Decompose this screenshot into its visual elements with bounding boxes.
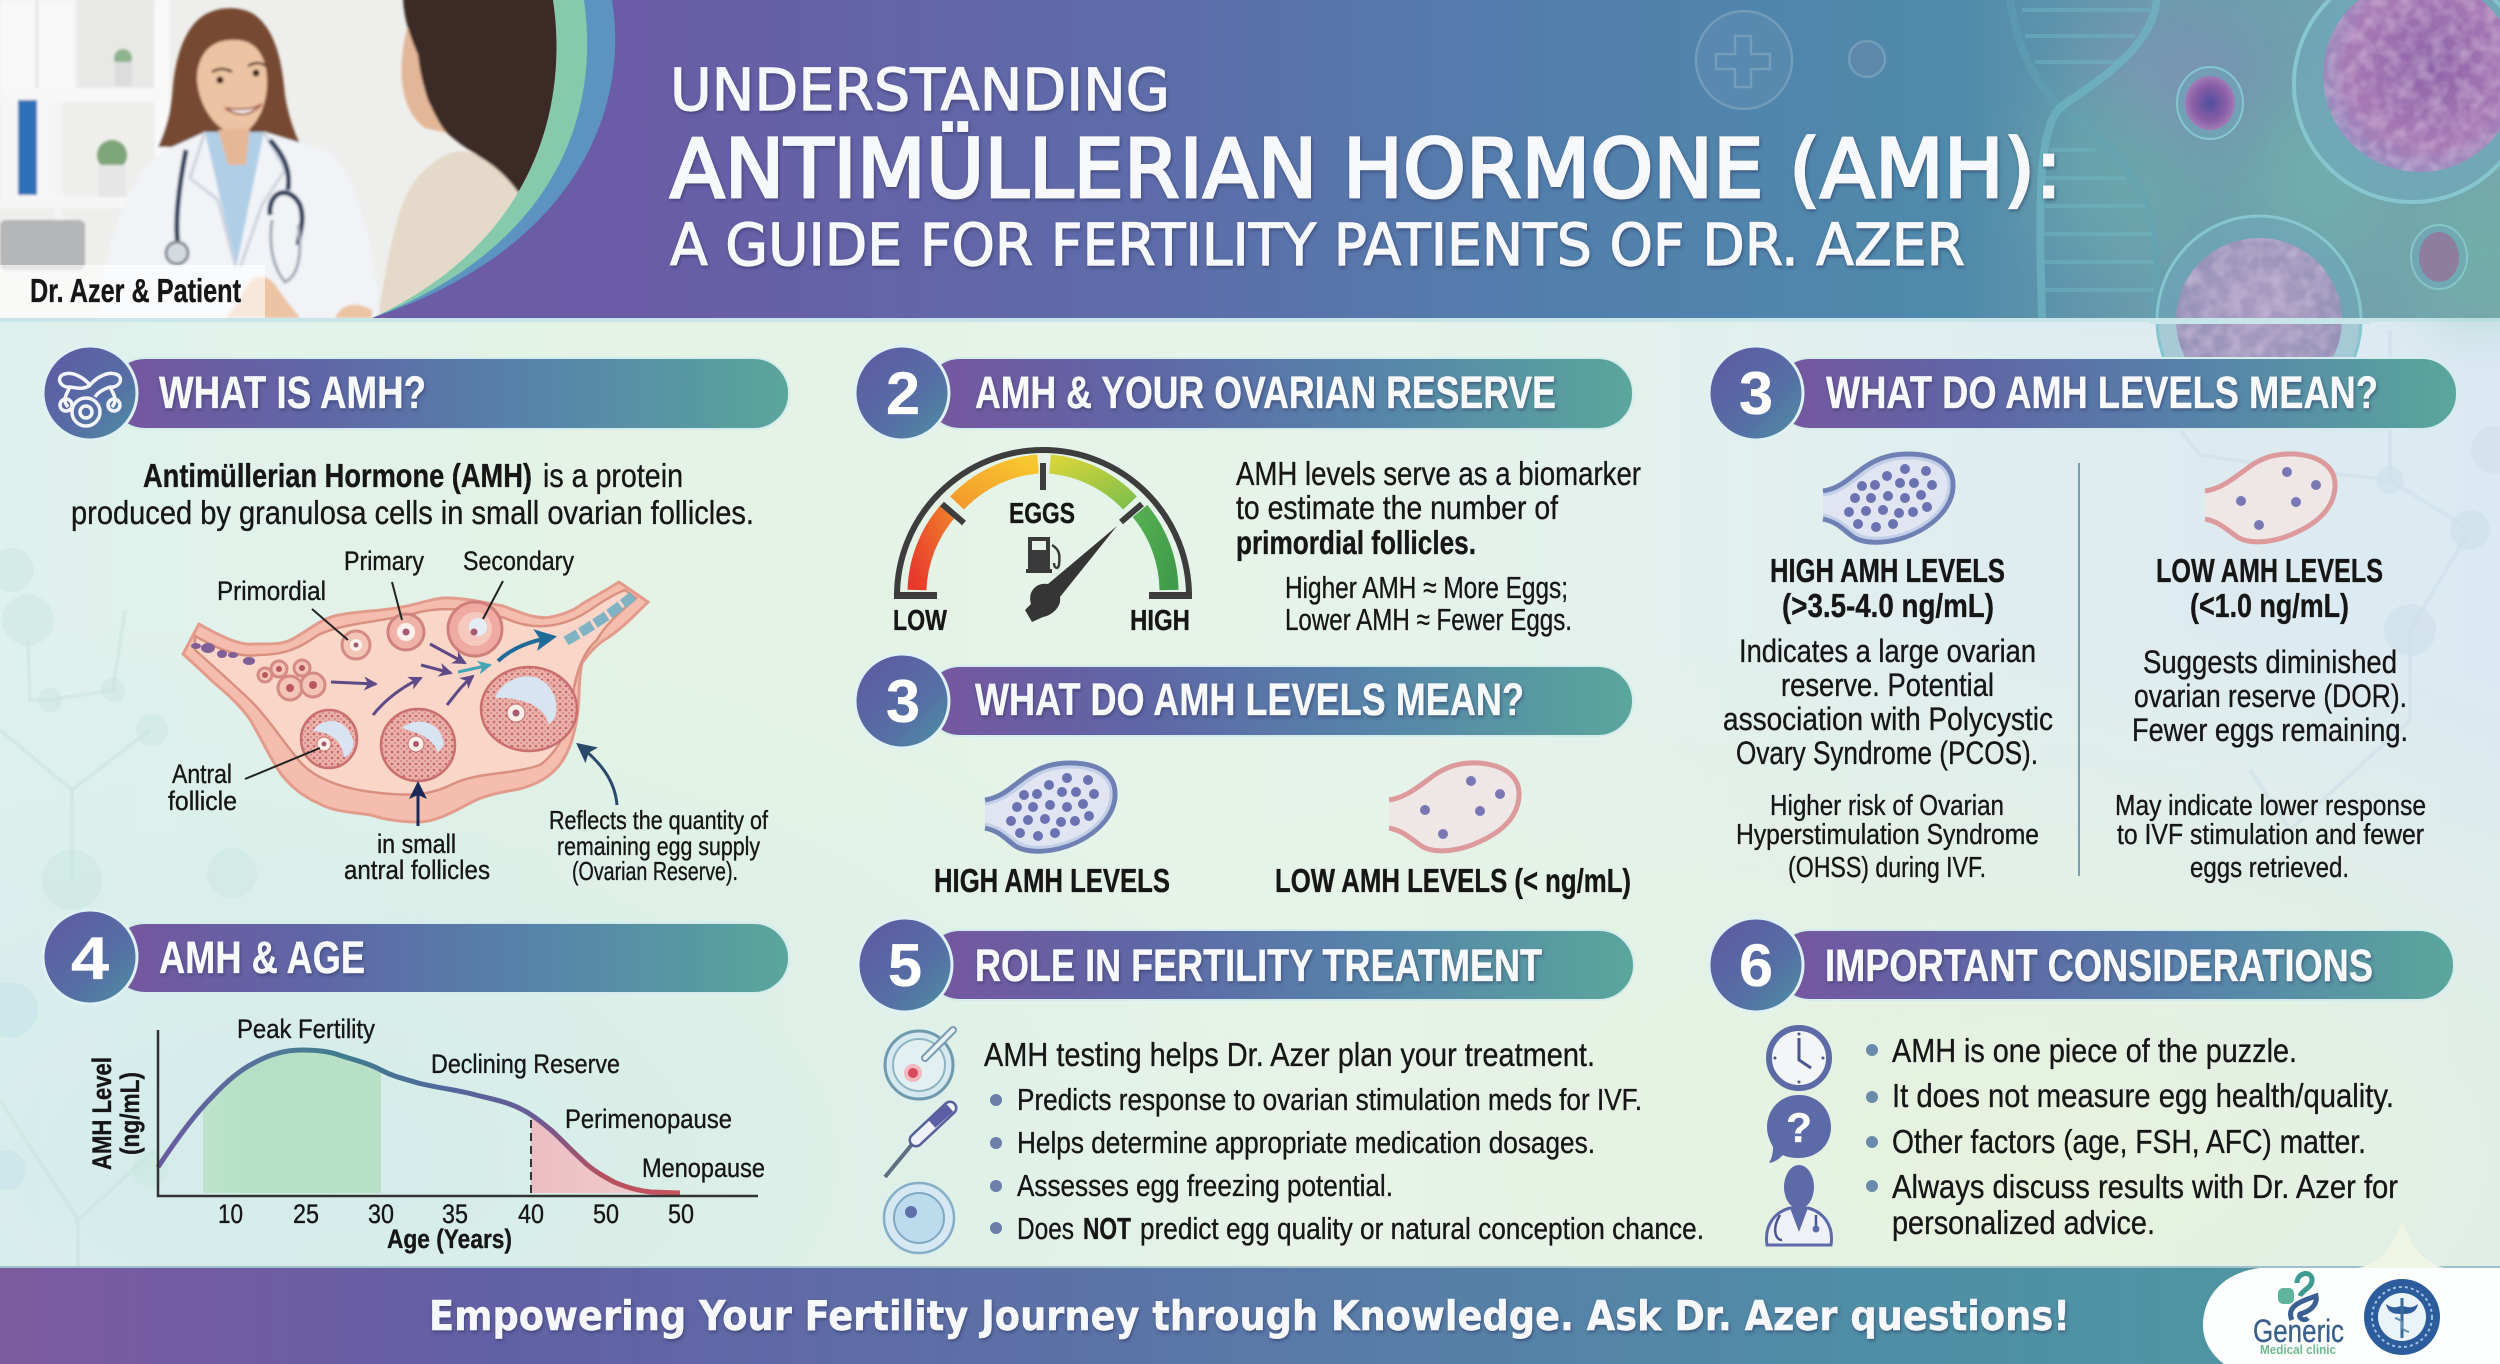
column: high AMH bbox=[1723, 454, 2053, 884]
gauge: EGGS bbox=[1009, 498, 1075, 530]
heading: considerations: IMPORTANT CONSIDERATIONS bbox=[1825, 940, 2373, 991]
heading: levels detail bbox=[1709, 346, 2457, 440]
high AMH text: Ovary Syndrome (PCOS). bbox=[1736, 735, 2038, 771]
high AMH text bbox=[1723, 552, 2053, 884]
heading: AMH and age: 4 bbox=[71, 925, 110, 992]
low AMH text: eggs retrieved. bbox=[2190, 852, 2349, 884]
panel: important considerations bbox=[1709, 918, 2454, 1245]
panel: AMH and age bbox=[43, 910, 789, 1254]
icon: clock bbox=[1769, 1028, 1829, 1088]
header background: blurred cellular texture bbox=[2030, 20, 2500, 320]
title: A GUIDE FOR FERTILITY PATIENTS OF DR. AZER bbox=[670, 211, 1965, 279]
icon: small purple cell bbox=[2177, 67, 2243, 139]
icon: petri dish bbox=[885, 1030, 953, 1099]
text: treatment list: AMH testing helps Dr. Azer plan your treatment. bbox=[984, 1036, 1595, 1073]
footer banner bbox=[0, 1222, 2500, 1364]
icon: high follicle ovary bbox=[985, 763, 1115, 851]
arrow: reflects quantity bbox=[580, 746, 617, 805]
icon: pipette bbox=[885, 1108, 950, 1177]
text: treatment list: Predicts response to ovarian stimulation meds for IVF. bbox=[1017, 1082, 1642, 1117]
icon: uterus bbox=[60, 373, 120, 426]
chart annotations: Declining Reserve bbox=[431, 1049, 620, 1079]
heading: role in treatment: ROLE IN FERTILITY TREATMENT bbox=[975, 940, 1542, 991]
follicle: primordial bbox=[342, 631, 370, 659]
high AMH text: (>3.5-4.0 ng/mL) bbox=[1782, 587, 1994, 624]
text: considerations list bbox=[1866, 1032, 2398, 1241]
label: high AMH: HIGH AMH LEVELS bbox=[934, 862, 1170, 899]
low AMH text: ovarian reserve (DOR). bbox=[2134, 678, 2407, 714]
panel: what is AMH bbox=[43, 346, 789, 886]
panel: AMH levels summary bbox=[855, 654, 1633, 899]
x axis ticks: 50 bbox=[593, 1199, 619, 1229]
heading: levels summary bbox=[855, 654, 1633, 748]
logo panel: Generic bbox=[2253, 1313, 2344, 1349]
low AMH text: to IVF stimulation and fewer bbox=[2117, 819, 2424, 851]
icon: lower cell bbox=[2150, 216, 2370, 424]
low AMH text: LOW AMH LEVELS bbox=[2156, 552, 2383, 589]
icon: faint plus cell bbox=[1696, 11, 1885, 109]
chart annotations: Menopause bbox=[642, 1153, 765, 1183]
text: considerations list: Other factors (age, FSH, AFC) matter. bbox=[1892, 1123, 2366, 1160]
heading: ovarian reserve bbox=[855, 346, 1633, 440]
icon: egg cell bbox=[884, 1183, 954, 1253]
text: considerations list: It does not measure egg health/quality. bbox=[1892, 1077, 2394, 1114]
labels: Reflects the quantity of bbox=[549, 805, 769, 835]
heading: ovarian reserve: AMH & YOUR OVARIAN RESERVE bbox=[975, 367, 1556, 418]
heading: considerations: 6 bbox=[1739, 932, 1773, 999]
panel: ovarian reserve bbox=[855, 346, 1641, 637]
icon: medical seal bbox=[2364, 1279, 2440, 1355]
labels: Primordial bbox=[217, 576, 326, 606]
text: treatment list: NOT bbox=[1083, 1211, 1131, 1246]
small primordial cluster bbox=[258, 660, 325, 700]
intro text: is a protein bbox=[543, 457, 683, 494]
label: low AMH: LOW AMH LEVELS (< ng/mL) bbox=[1275, 862, 1631, 899]
x axis ticks: 35 bbox=[442, 1199, 468, 1229]
icon: fuel pump bbox=[1026, 537, 1059, 573]
text: treatment list: Assesses egg freezing potential. bbox=[1017, 1168, 1393, 1203]
panel: role in fertility treatment bbox=[858, 918, 1704, 1253]
icon: high follicle ovary bbox=[1823, 454, 1953, 542]
labels bbox=[168, 546, 769, 886]
heading: considerations bbox=[1709, 918, 2454, 1012]
text: treatment list: predict egg quality or natural conception chance. bbox=[1140, 1211, 1704, 1246]
footer message: Empowering Your Fertility Journey through Knowledge. Ask Dr. Azer questions! bbox=[429, 1292, 2070, 1340]
heading: levels summary: 3 bbox=[886, 668, 920, 735]
y axis title bbox=[87, 1057, 145, 1170]
text: treatment list: Helps determine appropriate medication dosages. bbox=[1017, 1125, 1595, 1160]
text: considerations list: AMH is one piece of the puzzle. bbox=[1892, 1032, 2297, 1069]
logo panel bbox=[2203, 1222, 2500, 1364]
high AMH text: (OHSS) during IVF. bbox=[1788, 852, 1986, 884]
label leaders bbox=[245, 581, 503, 779]
labels: remaining egg supply bbox=[557, 831, 760, 861]
ovary body bbox=[183, 582, 648, 822]
photo: Dr. Azer and patient bbox=[0, 0, 600, 318]
text: treatment list: Does bbox=[1017, 1211, 1074, 1246]
chart annotations: Peak Fertility bbox=[237, 1014, 375, 1044]
follicle: primary bbox=[388, 614, 424, 650]
labels: Secondary bbox=[463, 546, 574, 576]
photo caption: Dr. Azer & Patient bbox=[30, 272, 241, 309]
gauge: HIGH bbox=[1130, 605, 1190, 637]
title: ANTIMÜLLERIAN HORMONE (AMH): bbox=[670, 123, 2062, 217]
egg beads left tube bbox=[191, 643, 255, 665]
heading: role in treatment: 5 bbox=[888, 932, 922, 999]
chart: AMH level by age bbox=[87, 1014, 765, 1254]
text: biomarker explanation: AMH levels serve as a biomarker bbox=[1236, 455, 1641, 492]
low AMH text: (<1.0 ng/mL) bbox=[2190, 587, 2349, 624]
x axis ticks: 50 bbox=[668, 1199, 694, 1229]
x axis ticks: 30 bbox=[368, 1199, 394, 1229]
x axis ticks: 40 bbox=[518, 1199, 544, 1229]
text: treatment list bbox=[984, 1036, 1704, 1246]
low AMH text: Suggests diminished bbox=[2143, 644, 2397, 680]
icon: low follicle ovary bbox=[1389, 763, 1519, 851]
maturation arrows bbox=[331, 637, 553, 715]
text: biomarker explanation: Lower AMH ≈ Fewer Eggs. bbox=[1285, 602, 1572, 637]
follicle: antral medium bbox=[381, 709, 455, 781]
intro text: Antimüllerian Hormone (AMH) bbox=[143, 457, 532, 494]
labels: Antral bbox=[172, 759, 232, 789]
low AMH text: Fewer eggs remaining. bbox=[2132, 712, 2408, 748]
patient bbox=[378, 151, 560, 318]
high AMH text: Higher risk of Ovarian bbox=[1770, 790, 2004, 822]
text: considerations list: personalized advice. bbox=[1892, 1204, 2155, 1241]
panel: AMH levels detail bbox=[1709, 346, 2457, 884]
decorative arc bands bbox=[0, 0, 615, 318]
x axis title: Age (Years) bbox=[387, 1224, 512, 1254]
icon: right small cell bbox=[2411, 225, 2467, 289]
teal ovum chain bbox=[566, 596, 633, 641]
gauge bbox=[893, 450, 1192, 637]
text: biomarker explanation: primordial follicles. bbox=[1236, 524, 1476, 561]
title bbox=[670, 56, 2062, 279]
icon: question bubble bbox=[1767, 1095, 1831, 1163]
y axis title: (ng/mL) bbox=[115, 1072, 145, 1155]
follicle: antral small bbox=[301, 710, 357, 768]
labels: Primary bbox=[344, 546, 424, 576]
text: biomarker explanation bbox=[1236, 455, 1641, 637]
heading: levels summary: WHAT DO AMH LEVELS MEAN? bbox=[975, 674, 1524, 725]
column: low AMH bbox=[2115, 454, 2426, 884]
high AMH text: association with Polycystic bbox=[1723, 701, 2053, 737]
icon: low follicle ovary bbox=[2205, 454, 2335, 542]
header banner bbox=[0, 0, 2500, 357]
heading: levels detail: WHAT DO AMH LEVELS MEAN? bbox=[1826, 367, 2378, 418]
heading: ovarian reserve: 2 bbox=[886, 360, 920, 427]
high AMH text: Hyperstimulation Syndrome bbox=[1736, 819, 2039, 851]
icon: generic clinic mark bbox=[2278, 1274, 2316, 1320]
x axis ticks bbox=[218, 1199, 694, 1229]
icon: doctor bbox=[1767, 1165, 1831, 1245]
x axis ticks: 10 bbox=[218, 1199, 243, 1229]
labels: antral follicles bbox=[344, 855, 490, 885]
photo caption bbox=[0, 265, 265, 318]
high AMH text: Indicates a large ovarian bbox=[1739, 633, 2036, 669]
arrow: in small antral follicles bbox=[416, 785, 420, 826]
logo panel: Medical clinic bbox=[2260, 1342, 2336, 1357]
title: UNDERSTANDING bbox=[670, 56, 1170, 124]
heading: levels detail: 3 bbox=[1739, 360, 1773, 427]
gauge needle bbox=[1025, 526, 1117, 622]
labels: (Ovarian Reserve). bbox=[572, 856, 738, 886]
heading: AMH and age bbox=[43, 910, 789, 1004]
y axis title: AMH Level bbox=[87, 1057, 117, 1170]
intro text: produced by granulosa cells in small ovarian follicles. bbox=[71, 494, 754, 531]
follicle: secondary bbox=[448, 602, 502, 656]
x axis ticks: 25 bbox=[293, 1199, 319, 1229]
icon: question bubble: ? bbox=[1786, 1104, 1812, 1151]
chart annotations bbox=[237, 1014, 765, 1183]
gauge: LOW bbox=[893, 605, 947, 637]
heading: AMH and age: AMH & AGE bbox=[159, 932, 365, 983]
high AMH text: reserve. Potential bbox=[1781, 667, 1994, 703]
intro text bbox=[71, 457, 754, 531]
high AMH text: HIGH AMH LEVELS bbox=[1770, 552, 2005, 589]
text: biomarker explanation: to estimate the number of bbox=[1236, 489, 1559, 526]
low AMH text bbox=[2115, 552, 2426, 884]
follicle: antral large bbox=[481, 667, 577, 751]
labels: in small bbox=[377, 829, 456, 859]
doctor bbox=[158, 8, 302, 148]
heading: what is AMH bbox=[43, 346, 789, 440]
labels: follicle bbox=[168, 786, 237, 816]
diagram: ovary with follicles bbox=[168, 546, 769, 886]
heading: role in treatment bbox=[858, 918, 1634, 1012]
text: biomarker explanation: Higher AMH ≈ More Eggs; bbox=[1285, 570, 1568, 605]
low AMH text: May indicate lower response bbox=[2115, 790, 2426, 822]
icon: DNA helix bbox=[2010, 0, 2157, 318]
heading: what is AMH: WHAT IS AMH? bbox=[159, 367, 426, 418]
text: considerations list: Always discuss results with Dr. Azer for bbox=[1892, 1168, 2398, 1205]
chart annotations: Perimenopause bbox=[565, 1104, 732, 1134]
icon: large purple cell bbox=[2294, 0, 2500, 202]
